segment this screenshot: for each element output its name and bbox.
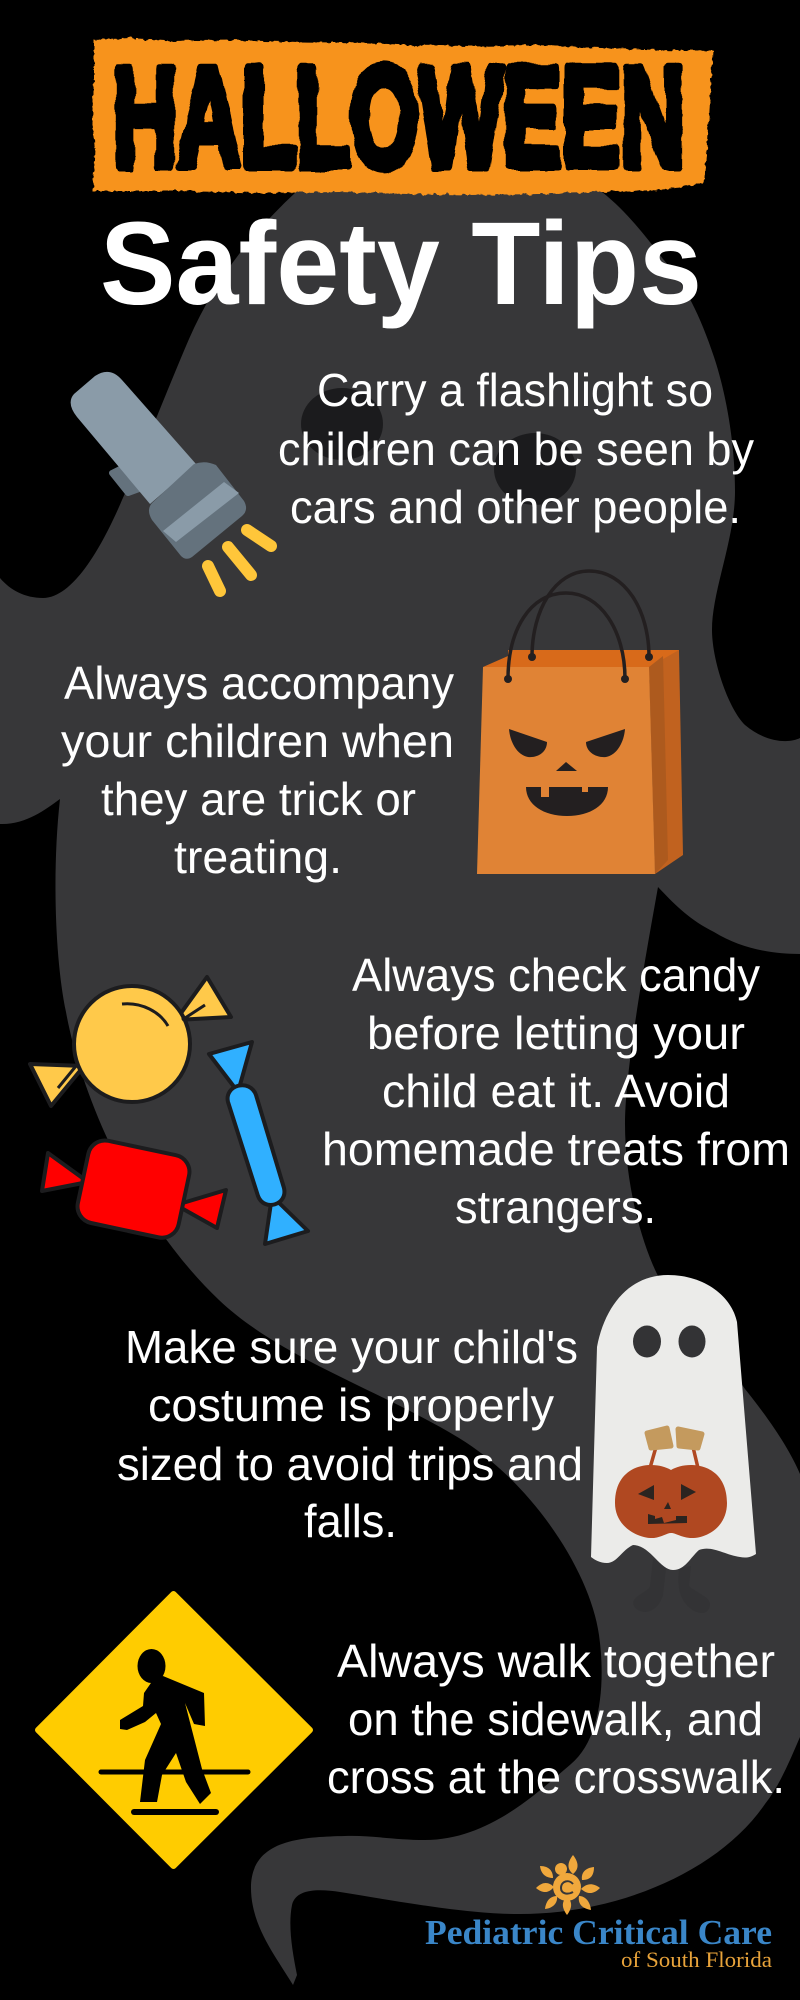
tip 2 text: Always accompany	[64, 657, 454, 709]
logo: Pediatric Critical Care	[425, 1855, 772, 1972]
tip 1 text: children can be seen by	[278, 423, 754, 475]
tip 5 text: on the sidewalk, and	[348, 1693, 763, 1745]
tip 5 text: cross at the crosswalk.	[327, 1751, 785, 1803]
tip 3 text: strangers.	[455, 1181, 656, 1233]
tip 4 text: falls.	[304, 1495, 397, 1547]
tip 1 text: Carry a flashlight so	[317, 364, 713, 416]
tip 2 text: your children when	[61, 715, 454, 767]
tip 1 text: cars and other people.	[290, 481, 741, 533]
tip 3 text: child eat it. Avoid	[382, 1065, 730, 1117]
tip 4 text	[117, 1321, 583, 1547]
red candy	[42, 1137, 226, 1241]
icon: candies	[30, 977, 308, 1244]
icon: child in ghost costume	[591, 1275, 756, 1613]
logo sun	[536, 1855, 600, 1915]
tip 2 text: treating.	[174, 831, 342, 883]
tip 3 text: homemade treats from	[322, 1123, 790, 1175]
tip 4 text: Make sure your child's	[125, 1321, 578, 1373]
tip 2 text: they are trick or	[101, 773, 416, 825]
tip 2 text	[61, 657, 454, 883]
blue candy	[209, 1042, 308, 1244]
title: Safety Tips: Safety Tips	[100, 198, 702, 330]
tip 4 text: sized to avoid trips and	[117, 1438, 583, 1490]
tip 4 text: costume is properly	[148, 1379, 554, 1431]
tip 3 text: before letting your	[367, 1007, 745, 1059]
logo: Pediatric Critical Care: Pediatric Critical Care	[425, 1913, 772, 1952]
logo: Pediatric Critical Care: of South Florida	[621, 1947, 772, 1972]
tip 5 text: Always walk together	[337, 1635, 775, 1687]
tip 3 text	[322, 949, 790, 1233]
tip 5 text	[327, 1635, 785, 1803]
tip 1 text	[278, 364, 754, 533]
yellow candy	[30, 977, 231, 1106]
icon: pedestrian crossing sign	[38, 1594, 310, 1866]
tip 3 text: Always check candy	[352, 949, 760, 1001]
icon: flashlight	[71, 372, 271, 591]
icon: pumpkin face bag	[477, 571, 683, 874]
